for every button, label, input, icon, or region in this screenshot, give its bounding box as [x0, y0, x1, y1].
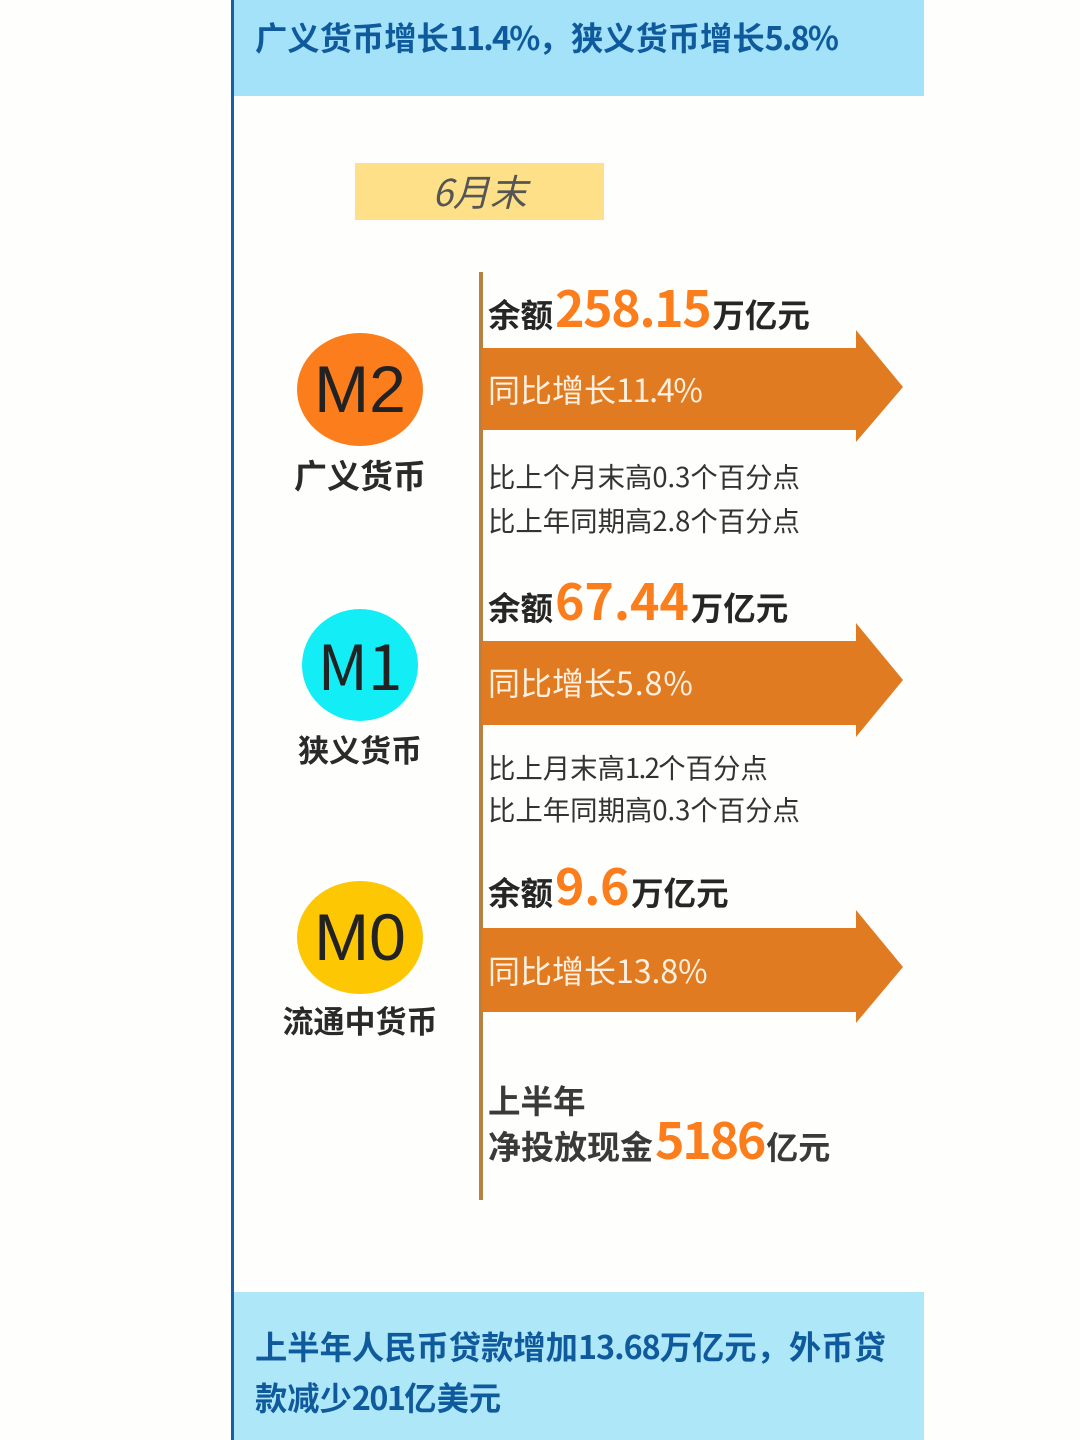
top banner [234, 0, 924, 96]
icon: M2 circle [297, 333, 423, 446]
label: broad money: 广义货币 [294, 450, 426, 498]
M1 notes second line: 比上年同期高0.3个百分点 [488, 788, 800, 828]
M2 notes: 比上个月末高0.3个百分点 [488, 455, 800, 495]
first half label: 上半年 [488, 1076, 586, 1123]
bottom banner text: 款减少201亿美元 [255, 1374, 501, 1420]
M1 notes: 比上月末高1.2个百分点 [488, 746, 768, 786]
M2 growth: 同比增长11.4% [488, 366, 702, 412]
icon: M1 circle: M1 [318, 618, 402, 708]
bottom banner text [255, 1323, 886, 1420]
icon: M0 circle: M0 [314, 900, 406, 974]
M2 notes second line: 比上年同期高2.8个百分点 [488, 499, 800, 539]
label: narrow money: 狭义货币 [298, 726, 422, 771]
M1 growth: 同比增长5.8% [488, 659, 694, 705]
left page border [231, 0, 234, 1440]
arrow: M1 [482, 623, 903, 737]
date label: 6月末 [432, 163, 527, 217]
M1 balance: 余额67.44万亿元 [488, 563, 788, 635]
icon: M0 circle [297, 881, 423, 994]
label: currency in circulation: 流通中货币 [282, 997, 438, 1042]
icon: M2 circle: M2 [314, 352, 406, 426]
net cash injection: 净投放现金5186亿元 [488, 1102, 830, 1174]
icon: M1 circle [302, 609, 418, 721]
M0 balance: 余额9.6万亿元 [488, 848, 729, 920]
arrow: M2 [482, 330, 903, 442]
bottom banner text: 上半年人民币贷款增加13.68万亿元，外币贷 [255, 1323, 886, 1369]
arrow: M0 [482, 910, 903, 1023]
vertical timeline [479, 272, 483, 1200]
M0 growth: 同比增长13.8% [488, 947, 708, 993]
bottom banner [234, 1292, 924, 1440]
date label [355, 163, 604, 220]
M2 balance: 余额258.15万亿元 [488, 270, 810, 342]
top banner: 广义货币增长11.4%，狭义货币增长5.8% [255, 14, 837, 60]
